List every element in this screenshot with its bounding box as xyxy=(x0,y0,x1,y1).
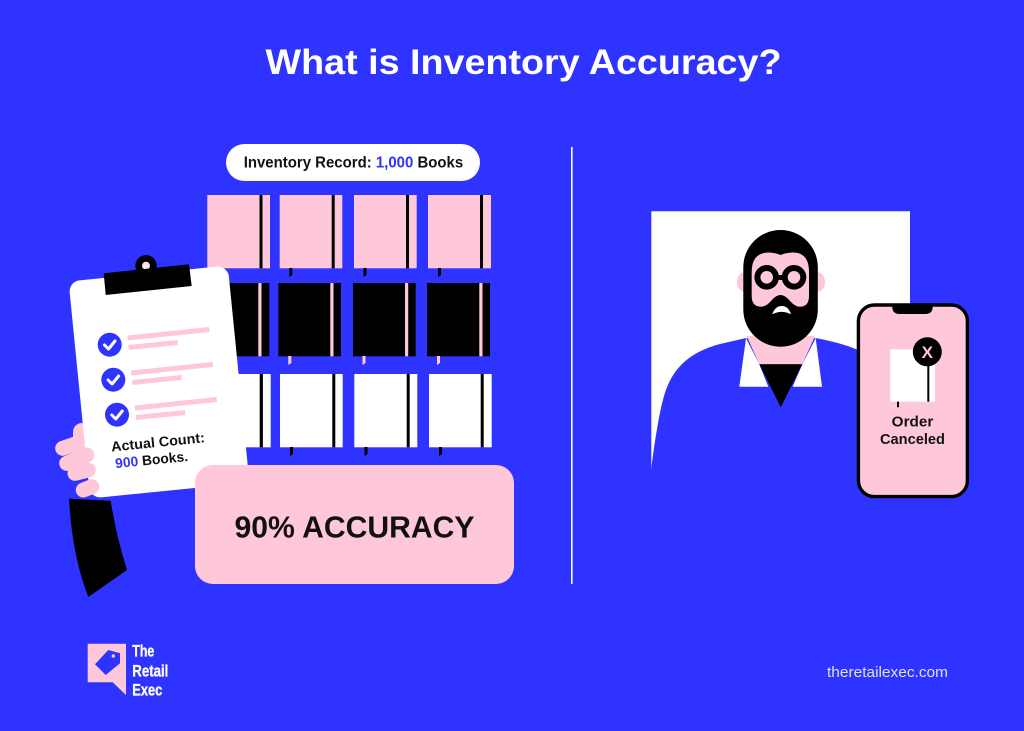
tie xyxy=(759,364,802,407)
mouth xyxy=(772,306,791,314)
logo mark xyxy=(88,644,126,695)
clipboard xyxy=(69,255,249,498)
checklist row 2 xyxy=(101,362,213,392)
cancel badge: X xyxy=(922,343,934,362)
white books row xyxy=(208,374,492,456)
accuracy result box xyxy=(195,465,514,584)
pink books row xyxy=(207,195,491,277)
inventory record label xyxy=(226,144,480,181)
actual count text xyxy=(110,429,207,471)
white backdrop xyxy=(651,211,910,470)
logo wordmark: Retail xyxy=(132,662,168,680)
collar xyxy=(739,338,822,387)
website url: theretailexec.com xyxy=(827,664,948,681)
inventory record label: Inventory Record: 1,000 Books xyxy=(244,154,463,172)
accuracy result box: 90% ACCURACY xyxy=(234,510,475,544)
icon: arm sleeve xyxy=(69,499,127,597)
logo xyxy=(88,643,168,700)
order canceled text: Canceled xyxy=(880,432,945,448)
phone notch xyxy=(892,304,933,314)
small book xyxy=(890,349,935,407)
hair and beard xyxy=(743,230,818,347)
logo wordmark: Exec xyxy=(132,682,162,700)
phone body xyxy=(858,305,967,497)
logo wordmark xyxy=(132,643,168,700)
logo tag icon xyxy=(95,650,120,675)
title: What is Inventory Accuracy? xyxy=(266,42,782,82)
face xyxy=(752,252,809,307)
order canceled text: Order xyxy=(892,415,934,431)
customer illustration xyxy=(651,211,910,480)
phone xyxy=(858,304,967,497)
checklist row 1 xyxy=(98,327,210,357)
book grid xyxy=(207,195,492,456)
cancel badge xyxy=(913,337,942,366)
icon: hand thumb and first finger xyxy=(63,423,93,448)
order canceled text xyxy=(880,415,945,448)
neck xyxy=(747,336,815,364)
glasses xyxy=(757,268,803,287)
actual count text: 900 Books. xyxy=(114,448,189,471)
black books row xyxy=(207,283,490,365)
logo wordmark: The xyxy=(132,643,154,661)
ears xyxy=(737,272,753,292)
checklist row 3 xyxy=(105,397,217,427)
customer body xyxy=(651,338,860,480)
actual count text: Actual Count: xyxy=(110,429,206,454)
clipboard board xyxy=(69,266,249,498)
clipboard clip xyxy=(104,255,192,295)
icon: hand fingers xyxy=(67,455,92,490)
